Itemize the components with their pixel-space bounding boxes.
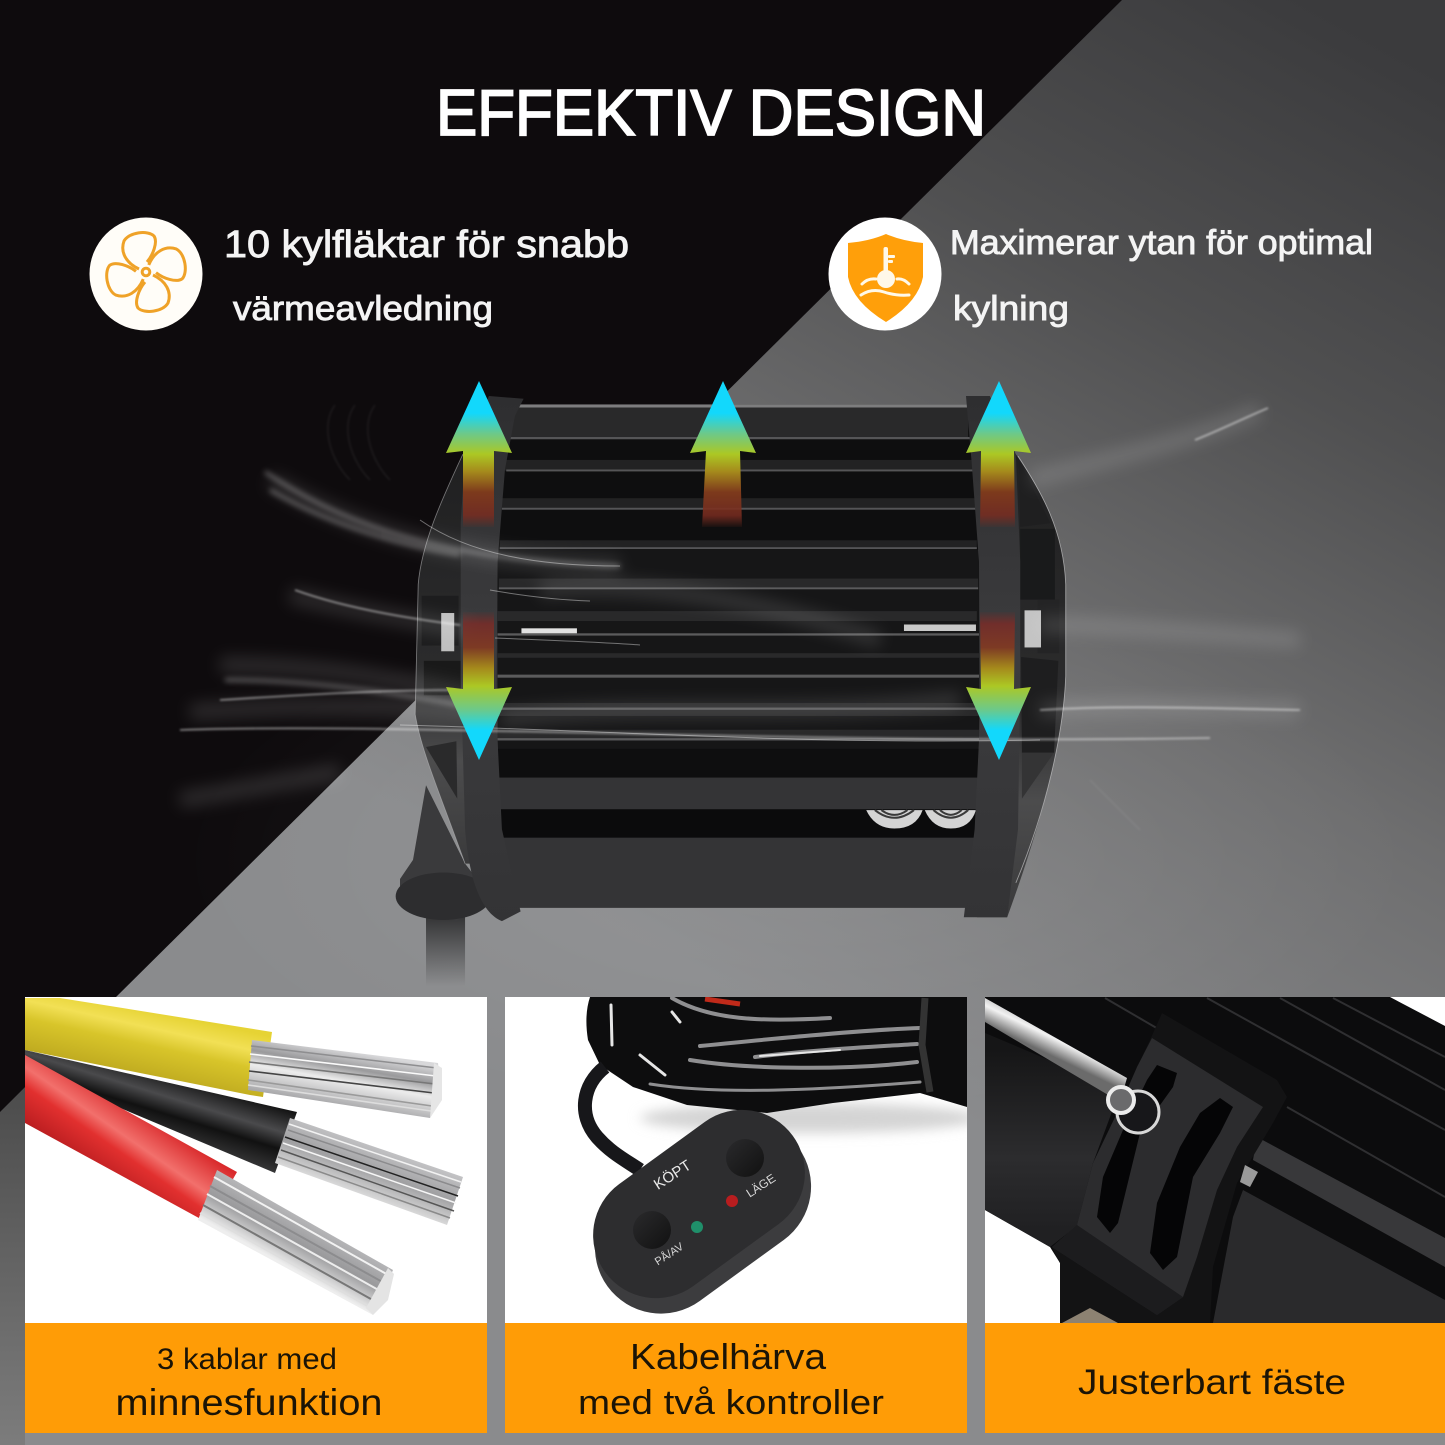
label bar: harness [505,1323,967,1433]
panel: adjustable mount [985,997,1445,1433]
fin lines [1105,998,1445,1197]
label bar: mount: Justerbart fäste [1078,1363,1346,1402]
left metal band [461,396,524,921]
remote controller: KÖPT [650,1156,694,1193]
label bar: cables [25,1323,487,1433]
panel: three cables [25,997,487,1433]
text: surface feature: Maximerar ytan för optimal [950,224,1373,262]
left end cap [415,454,504,864]
white corners [1390,997,1445,1026]
bolts [441,613,454,651]
bolt [1108,1087,1159,1133]
right end cap [977,454,1066,917]
heatsink fins [498,460,979,740]
light bar body [985,1033,1120,1247]
label bar: cables: minnesfunktion [116,1382,382,1423]
arrow: left up [446,381,512,527]
remote controller: LÄGE [744,1171,778,1200]
heatsink body [498,404,979,908]
black cable [25,1050,297,1173]
mounting nuts [866,810,976,828]
feature: fan cooling [90,218,629,330]
icon: fan [90,218,202,330]
red cable strands [198,1170,394,1315]
haze over fins [498,550,979,749]
photo: bracket [985,997,1445,1323]
cable shadow [640,1103,980,1133]
cable bundle [586,997,967,1113]
text: surface feature: kylning [953,290,1069,328]
remote controller: PÅ/AV [652,1240,686,1268]
panel: wiring harness with controller [505,997,980,1433]
arrow: left down [446,612,512,760]
threaded details [521,628,577,633]
label bar: harness: Kabelhärva [630,1336,827,1377]
icon: shield with key [828,218,942,330]
yellow cable strands [248,1040,442,1118]
title: EFFEKTIV DESIGN [436,76,986,149]
mounting pole [426,898,465,986]
lamp structure [396,396,1066,986]
lower nut [1062,1308,1118,1323]
photo: harness [505,997,980,1340]
arrow: centre up [690,381,756,527]
label bar: harness: med två kontroller [578,1384,884,1422]
hex key [985,998,1127,1102]
bracket outer [1058,1026,1263,1263]
yellow cable [25,998,272,1097]
black cable strands [275,1118,463,1225]
photo: cables [25,997,487,1323]
label bar: cables: 3 kablar med [157,1343,337,1376]
mounting bracket [400,785,493,921]
right metal band [964,396,1020,917]
controller cable [585,1067,640,1170]
label bar: mount [985,1323,1445,1433]
feature: maximised surface [828,218,1373,330]
text: surface feature [950,224,1373,328]
remote controller [593,1110,812,1314]
product: LED lamp with cooling fins [180,381,1300,986]
bracket slots [1097,1065,1177,1233]
bracket plate [1077,1038,1263,1297]
text: fan feature: värmeavledning [233,290,493,328]
airflow streaks [180,405,1300,830]
red cable [25,1055,237,1223]
text: fan feature [224,224,629,328]
arrow: right up [966,381,1031,527]
arrow: right down [966,612,1031,760]
text: fan feature: 10 kylfläktar för snabb [224,224,629,266]
small screw [1240,1165,1258,1187]
